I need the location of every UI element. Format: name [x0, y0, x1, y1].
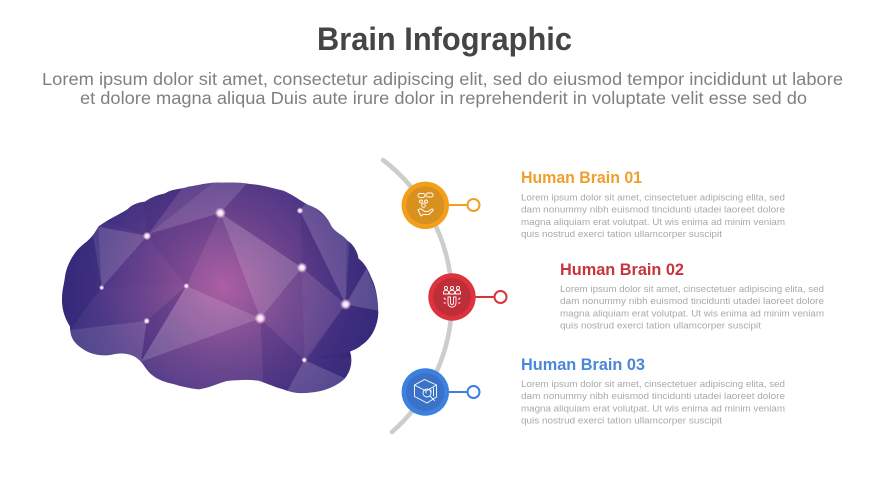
step 03 text: [521, 356, 785, 425]
step 02 text: magna aliquiam erat volutpat. Ut wis enima ad minim veniam: [560, 308, 824, 318]
step 03 text: Lorem ipsum dolor sit amet, cinsectetuer adipiscing elita, sed: [521, 379, 785, 389]
subtitle: Lorem ipsum dolor sit amet, consectetur adipiscing elit, sed do eiusmod tempor incididunt ut labore: [42, 69, 843, 89]
step 03 text: quis nostrud exerci tation ullamcorper suscipit: [521, 415, 722, 425]
step 03 text: dam nonummy nibh euismod tincidunti utadei laoreet dolore: [521, 391, 785, 401]
brain network nodes: [99, 207, 351, 363]
step 03 text: Human Brain 03: [521, 356, 645, 374]
step 01 text: Lorem ipsum dolor sit amet, cinsectetuer adipiscing elita, sed: [521, 192, 785, 202]
icon: box with magnifier: [414, 380, 436, 403]
step 03 marker: [402, 368, 480, 416]
icon: hand with ideas: [418, 193, 433, 216]
step 02 text: Lorem ipsum dolor sit amet, cinsectetuer adipiscing elita, sed: [560, 284, 824, 294]
step 02 text: dam nonummy nibh euismod tincidunti utadei laoreet dolore: [560, 296, 824, 306]
subtitle: et dolore magna aliqua Duis aute irure dolor in reprehenderit in voluptate velit esse sed do: [80, 88, 807, 108]
curved connector arc: [383, 160, 452, 432]
step 02 text: quis nostrud exerci tation ullamcorper suscipit: [560, 320, 761, 330]
step 01 text: magna aliquiam erat volutpat. Ut wis enima ad minim veniam: [521, 217, 785, 227]
infographic canvas: [44, 26, 842, 434]
step 01 text: Human Brain 01: [521, 169, 642, 187]
brain illustration: [62, 182, 378, 394]
step 01 text: quis nostrud exerci tation ullamcorper suscipit: [521, 229, 722, 239]
step 01 marker: [402, 182, 480, 229]
title: Brain Infographic: [317, 21, 572, 57]
icon: team with magnet: [444, 286, 460, 307]
step 02 marker: [428, 273, 506, 321]
subtitle: [42, 69, 843, 108]
step 01 text: [521, 169, 785, 239]
step 03 text: magna aliquiam erat volutpat. Ut wis enima ad minim veniam: [521, 403, 785, 413]
step 02 text: [560, 261, 824, 330]
step 02 text: Human Brain 02: [560, 261, 684, 279]
step 01 text: dam nonummy nibh euismod tincidunti utadei laoreet dolore: [521, 205, 785, 215]
